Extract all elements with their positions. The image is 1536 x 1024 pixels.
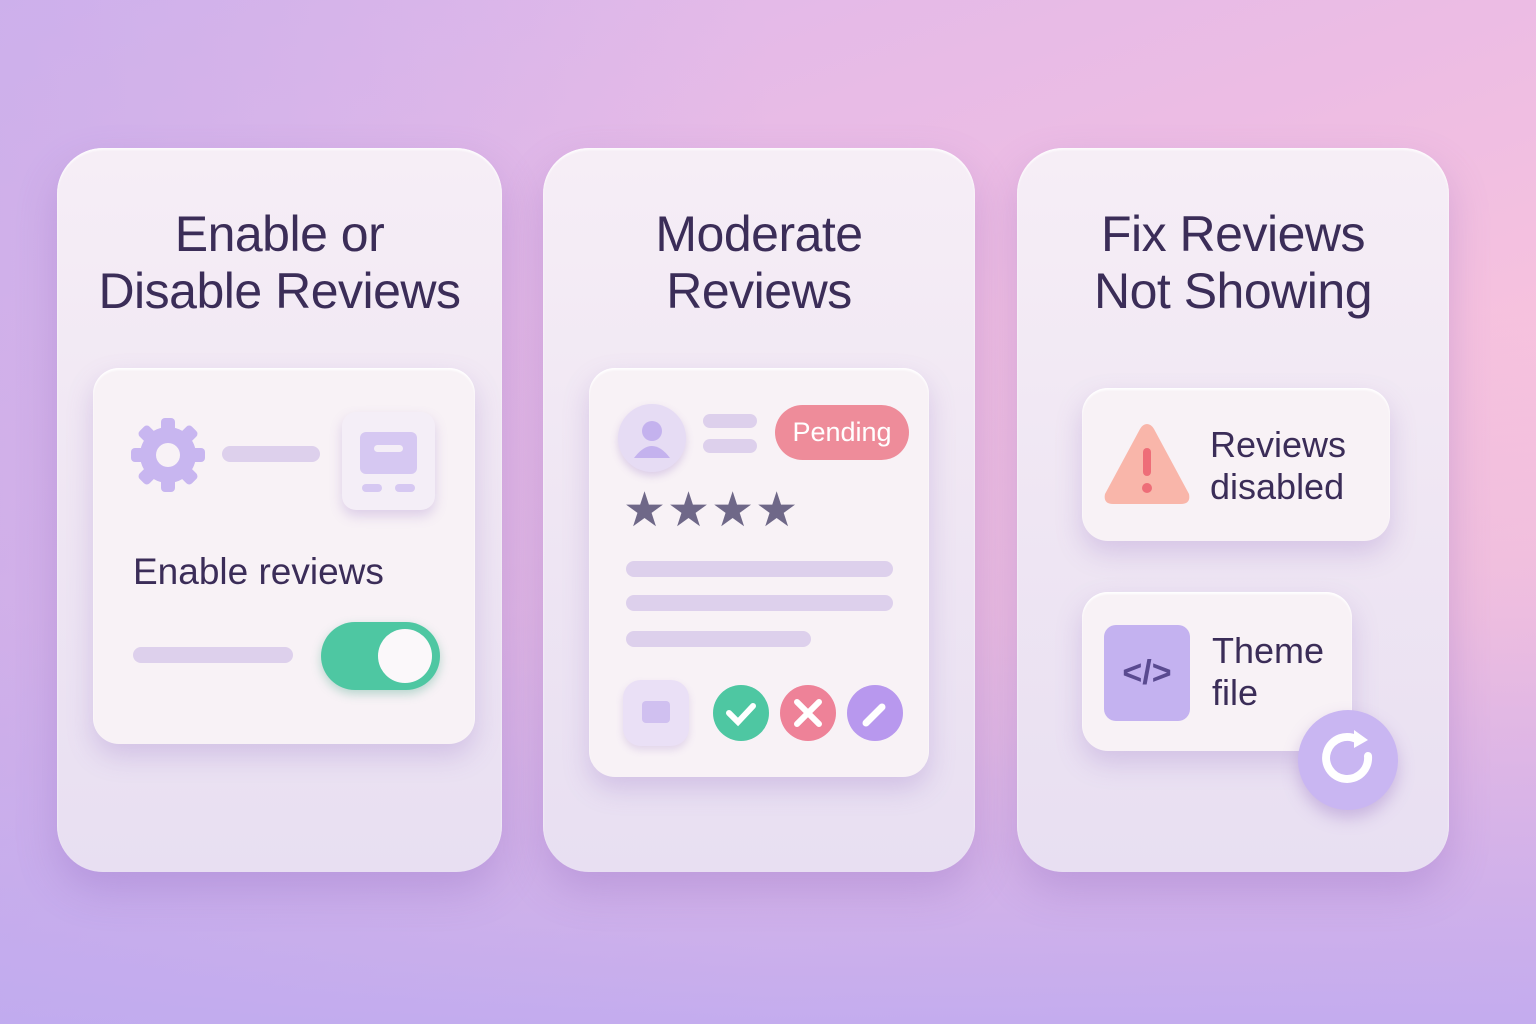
title 1: Disable Reviews <box>98 263 461 319</box>
panel: theme file: file <box>1212 672 1258 713</box>
title 2: Reviews <box>666 263 852 319</box>
title 3: Fix Reviews <box>1101 206 1365 262</box>
icon: layout card <box>342 412 435 510</box>
card: moderate <box>543 148 975 872</box>
icon: gear <box>131 418 205 492</box>
refresh button <box>1298 710 1398 810</box>
card: fix <box>1017 148 1449 872</box>
card: enable or disable <box>57 148 502 872</box>
panel: theme file: </> <box>1122 654 1172 692</box>
panel: review <box>589 368 929 777</box>
title 3 <box>1094 206 1372 319</box>
panel: reviews disabled <box>1082 388 1390 541</box>
toggle <box>321 622 440 690</box>
title 2: Moderate <box>655 206 863 262</box>
label: enable reviews: Enable reviews <box>133 551 384 592</box>
avatar <box>618 404 686 472</box>
pending badge <box>775 405 909 460</box>
panel: reviews disabled: Reviews <box>1210 424 1346 465</box>
panel: theme file: Theme <box>1212 630 1324 671</box>
panel: settings <box>93 368 475 744</box>
stars: ★★★★ <box>623 484 799 537</box>
title 1 <box>98 206 461 319</box>
title 3: Not Showing <box>1094 263 1372 319</box>
title 2 <box>655 206 863 319</box>
panel: reviews disabled: disabled <box>1210 466 1344 507</box>
panel: theme file <box>1082 592 1352 751</box>
pending badge: Pending <box>792 417 892 447</box>
actions <box>623 680 689 746</box>
title 1: Enable or <box>175 206 384 262</box>
